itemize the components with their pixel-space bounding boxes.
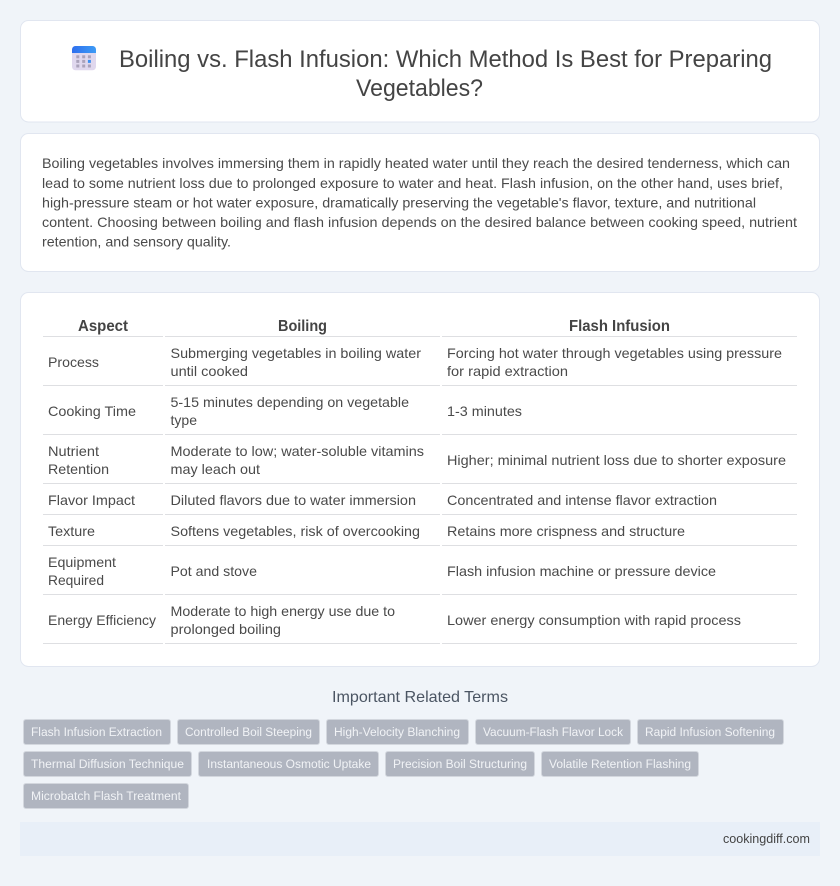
row: energy efficiency: Lower energy consumption with rapid process xyxy=(447,612,741,628)
row: cooking time: Cooking Time xyxy=(48,403,136,419)
heading: important related terms: Important Related Terms xyxy=(332,689,508,706)
row: process: for rapid extraction xyxy=(447,363,568,379)
row: nutrient retention: Moderate to low; water-soluble vitamins xyxy=(170,443,424,459)
table header row: Aspect xyxy=(78,318,129,335)
row: process: Submerging vegetables in boiling water xyxy=(170,345,421,361)
row: nutrient retention xyxy=(48,443,786,477)
row: texture: Texture xyxy=(48,523,95,539)
row: texture: Softens vegetables, risk of overcooking xyxy=(170,523,420,539)
row: flavor impact: Concentrated and intense flavor extraction xyxy=(447,492,717,508)
tag list: related terms: Flash Infusion Extraction xyxy=(31,725,162,739)
panel: introduction text: retention, and sensory quality. xyxy=(42,234,231,250)
row: equipment required: Pot and stove xyxy=(170,563,257,579)
row: process xyxy=(48,345,782,379)
row: flavor impact: Diluted flavors due to water immersion xyxy=(170,492,416,508)
panel: introduction text: lead to some nutrient loss due to prolonged exposure to water and heat. Flash infusion, on the other hand, uses brief, xyxy=(42,175,783,191)
row: energy efficiency: Energy Efficiency xyxy=(48,612,156,628)
icon: calendar xyxy=(72,46,96,70)
row: flavor impact xyxy=(48,492,717,508)
row: nutrient retention: Higher; minimal nutrient loss due to shorter exposure xyxy=(447,452,786,468)
row: nutrient retention: Retention xyxy=(48,461,109,477)
tag list: related terms: Precision Boil Structuring xyxy=(393,757,527,771)
tag list: related terms: Instantaneous Osmotic Uptake xyxy=(207,757,371,771)
table header row xyxy=(78,318,670,335)
row: equipment required: Flash infusion machine or pressure device xyxy=(447,563,716,579)
row: equipment required: Equipment xyxy=(48,554,116,570)
header panel xyxy=(20,20,820,122)
table header row: Flash Infusion xyxy=(569,318,670,335)
panel: introduction text: high-pressure steam or hot water exposure, dramatically preserving the vegetable's flavor, texture, and nutritional xyxy=(42,194,756,210)
footer bar: cookingdiff.com xyxy=(723,832,810,846)
table header row: Boiling xyxy=(278,318,327,335)
row: nutrient retention: Nutrient xyxy=(48,443,99,459)
footer bar xyxy=(20,822,820,856)
row: equipment required xyxy=(48,554,716,588)
tag list: related terms: High-Velocity Blanching xyxy=(334,725,460,739)
panel: comparison table xyxy=(20,292,820,666)
row: process: Forcing hot water through vegetables using pressure xyxy=(447,345,782,361)
row: texture: Retains more crispness and structure xyxy=(447,523,685,539)
panel: introduction text: Boiling vegetables involves immersing them in rapidly heated water until they reach the desired tenderness, which can xyxy=(42,155,790,171)
tag list: related terms: Rapid Infusion Softening xyxy=(645,725,775,739)
row: energy efficiency: Moderate to high energy use due to xyxy=(170,603,395,619)
row: cooking time: 1-3 minutes xyxy=(447,403,522,419)
title xyxy=(119,46,772,102)
row: process: until cooked xyxy=(170,363,248,379)
tag list: related terms: Controlled Boil Steeping xyxy=(185,725,312,739)
panel: introduction text xyxy=(20,134,820,272)
panel: introduction text: content. Choosing between boiling and flash infusion depends on the desired balance between cooking speed, nutrient xyxy=(42,214,797,230)
row: energy efficiency xyxy=(48,603,741,637)
tag list: related terms: Vacuum-Flash Flavor Lock xyxy=(483,725,624,739)
tag list: related terms xyxy=(24,720,784,808)
row: equipment required: Required xyxy=(48,572,104,588)
row: energy efficiency: prolonged boiling xyxy=(170,621,281,637)
row: process: Process xyxy=(48,354,99,370)
row: cooking time: 5-15 minutes depending on vegetable xyxy=(170,394,409,410)
row: texture xyxy=(48,523,685,539)
row: flavor impact: Flavor Impact xyxy=(48,492,135,508)
row: nutrient retention: may leach out xyxy=(170,461,260,477)
tag list: related terms: Thermal Diffusion Technique xyxy=(31,757,184,771)
tag list: related terms: Microbatch Flash Treatment xyxy=(31,789,182,803)
title: Boiling vs. Flash Infusion: Which Method Is Best for Preparing xyxy=(119,46,772,73)
title: Vegetables? xyxy=(356,75,483,102)
row: cooking time xyxy=(48,394,522,428)
row: cooking time: type xyxy=(170,412,197,428)
tag list: related terms: Volatile Retention Flashing xyxy=(549,757,691,771)
